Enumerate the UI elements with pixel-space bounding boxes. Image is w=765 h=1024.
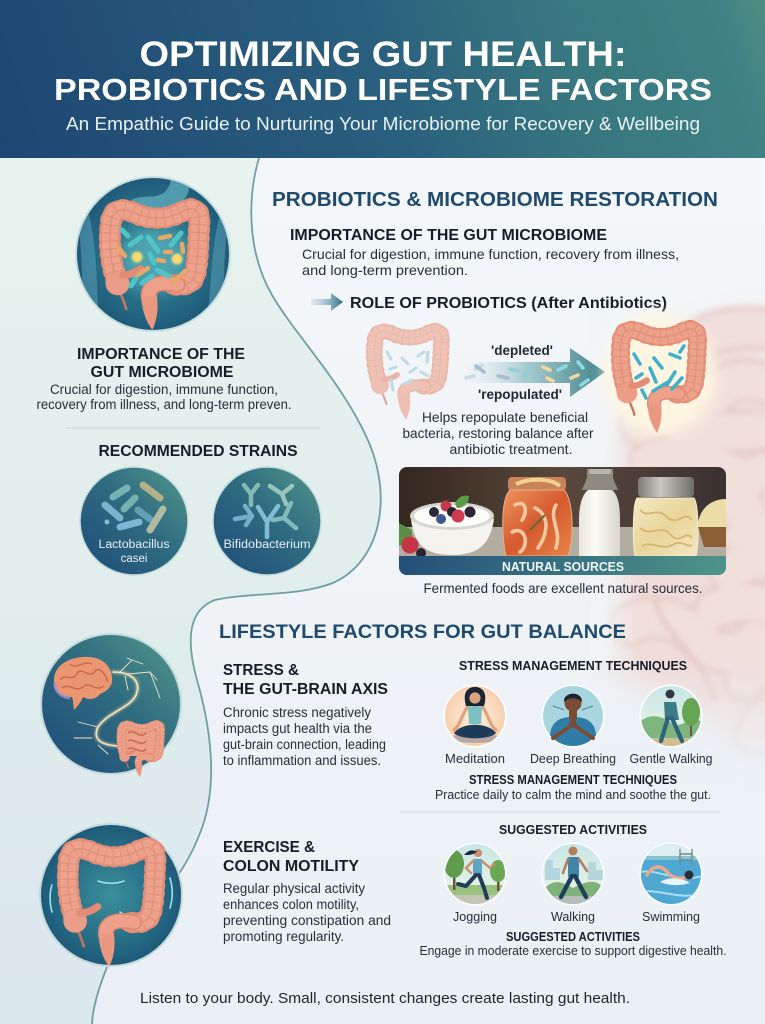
icon: lactobacillus casei: casei (121, 553, 147, 565)
right panel with curved edge (92, 158, 765, 1024)
icon: swimming (640, 842, 702, 906)
text: importance of the gut microbiome (left): IMPORTANCE OF THE (77, 346, 245, 363)
text: importance of the gut microbiome (left): Crucial for digestion, immune function, (50, 382, 278, 397)
labels: activities: Walking (551, 910, 595, 924)
icon: lactobacillus casei (80, 467, 188, 575)
footer message: Listen to your body. Small, consistent changes create lasting gut health. (140, 990, 630, 1007)
text: importance of the gut microbiome (right): IMPORTANCE OF THE GUT MICROBIOME (290, 227, 607, 244)
text: stress and gut-brain axis: THE GUT-BRAIN AXIS (223, 681, 388, 698)
text: fermented foods: Fermented foods are excellent natural sources. (424, 580, 702, 596)
heading: probiotics and microbiome restoration: PROBIOTICS & MICROBIOME RESTORATION (272, 188, 718, 211)
labels: activities: Jogging (453, 910, 497, 924)
icon: kimchi jar (503, 477, 572, 556)
nerve (74, 658, 160, 754)
text: importance of the gut microbiome (right): Crucial for digestion, immune function, recovery from illness, (302, 246, 679, 262)
text: importance of the gut microbiome (right) (290, 227, 679, 278)
icon: walking (542, 842, 605, 910)
label: repopulated: 'repopulated' (478, 386, 562, 402)
text: importance of the gut microbiome (right): and long-term prevention. (302, 262, 468, 278)
icon: lactobacillus casei: Lactobacillus (98, 539, 170, 551)
heading: lifestyle factors: LIFESTYLE FACTORS FOR GUT BALANCE (219, 621, 626, 643)
icon: milk bottle (579, 469, 620, 556)
labels: stress techniques: Deep Breathing (530, 752, 616, 766)
icon: gut-brain axis circle (40, 633, 182, 777)
text: exercise and colon motility: EXERCISE & (223, 839, 315, 856)
icon: depleted colon (371, 331, 442, 420)
icon: deep breathing (542, 684, 604, 748)
text: stress and gut-brain axis (223, 662, 388, 768)
caption band: NATURAL SOURCES (502, 560, 624, 574)
icon: yogurt bowl (410, 496, 494, 555)
text: exercise and colon motility: COLON MOTILITY (223, 858, 359, 875)
heading: role of probiotics: ROLE OF PROBIOTICS (After Antibiotics) (350, 295, 667, 312)
icon: gentle walking (640, 684, 702, 750)
caption band (399, 556, 726, 575)
labels: stress techniques (445, 752, 713, 766)
icon: sauerkraut jar (633, 477, 698, 556)
text: suggested activities note (420, 930, 726, 958)
heading: stress management techniques: STRESS MANAGEMENT TECHNIQUES (459, 658, 687, 673)
text: suggested activities note: Engage in moderate exercise to support digestive health. (420, 943, 726, 958)
bacteria (119, 230, 185, 286)
arrow: role of probiotics (311, 293, 343, 311)
text: exercise and colon motility: promoting regularity. (223, 929, 344, 944)
labels: activities (453, 910, 700, 924)
labels: activities: Swimming (642, 910, 700, 924)
text: suggested activities note: SUGGESTED ACTIVITIES (506, 930, 640, 944)
text: probiotics help repopulate: antibiotic treatment. (450, 441, 572, 457)
heading: recommended strains: RECOMMENDED STRAINS (98, 443, 298, 460)
icon: restored colon (604, 315, 716, 435)
text: exercise and colon motility: Regular physical activity (223, 881, 365, 896)
header banner (0, 0, 765, 158)
text: stress and gut-brain axis: STRESS & (223, 662, 299, 679)
brain (54, 657, 112, 710)
background: faint intestines (604, 302, 765, 753)
text: importance of the gut microbiome (left): recovery from illness, and long-term preven. (36, 397, 292, 412)
arrow: depleted to repopulated with bacteria (460, 348, 605, 397)
icon: side dish (698, 499, 726, 547)
text: importance of the gut microbiome (left): GUT MICROBIOME (90, 364, 234, 381)
text: stress management note: STRESS MANAGEMENT TECHNIQUES (469, 773, 677, 787)
icon: berries beside bowl (399, 523, 426, 558)
text: probiotics help repopulate (402, 409, 594, 457)
text: probiotics help repopulate: Helps repopulate beneficial (422, 409, 588, 425)
title (54, 35, 712, 107)
icon: meditation (444, 684, 506, 748)
subtitle: An Empathic Guide to Nurturing Your Microbiome for Recovery & Wellbeing (66, 114, 700, 134)
image panel: fermented foods (399, 467, 726, 575)
icon: bifidobacterium (213, 467, 321, 575)
title: PROBIOTICS AND LIFESTYLE FACTORS (54, 72, 712, 107)
icon: colon motility circle (39, 823, 183, 967)
labels: stress techniques: Meditation (445, 752, 505, 766)
text: stress and gut-brain axis: gut-brain connection, leading (223, 737, 386, 752)
text: stress management note (435, 773, 711, 802)
text: exercise and colon motility (223, 839, 391, 944)
title: OPTIMIZING GUT HEALTH: (140, 35, 626, 74)
text: exercise and colon motility: enhances colon motility, (223, 897, 359, 912)
text: stress and gut-brain axis: to inflammation and issues. (223, 753, 381, 768)
text: stress management note: Practice daily to calm the mind and soothe the gut. (435, 787, 711, 802)
icon: bifidobacterium: Bifidobacterium (224, 539, 310, 551)
label: depleted: 'depleted' (491, 342, 553, 358)
text: exercise and colon motility: preventing constipation and (223, 913, 391, 928)
small intestine (119, 725, 160, 777)
icon: jogging (444, 842, 506, 906)
text: importance of the gut microbiome (left) (36, 346, 292, 412)
heading: suggested activities: SUGGESTED ACTIVITIES (499, 822, 647, 837)
text: stress and gut-brain axis: Chronic stress negatively (223, 705, 371, 720)
text: stress and gut-brain axis: impacts gut health via the (223, 721, 372, 736)
icon: gut microbiome circle (74, 176, 232, 332)
labels: stress techniques: Gentle Walking (630, 752, 713, 766)
text: probiotics help repopulate: bacteria, restoring balance after (402, 425, 594, 441)
